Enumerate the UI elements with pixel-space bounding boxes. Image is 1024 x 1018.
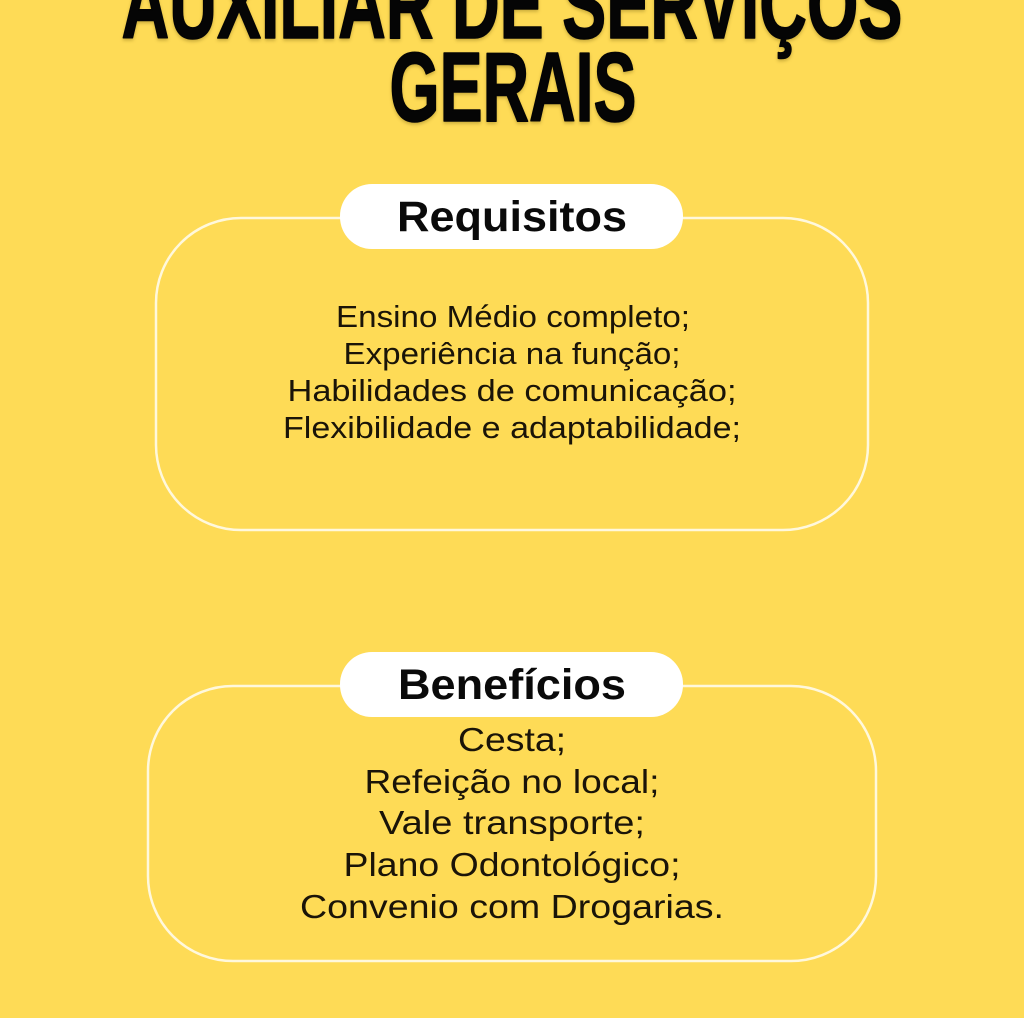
heading pill: requisitos: Requisitos: [397, 193, 627, 241]
text block: beneficios list: [300, 722, 724, 926]
text block: requisitos list: Flexibilidade e adaptabilidade;: [283, 410, 741, 445]
text block: beneficios list: Convenio com Drogarias.: [300, 889, 724, 926]
text block: beneficios list: Plano Odontológico;: [344, 847, 680, 884]
heading pill: beneficios: Benefícios: [398, 661, 626, 709]
panel: beneficios: [148, 652, 876, 961]
title: GERAIS: [390, 32, 636, 142]
text block: beneficios list: Cesta;: [458, 722, 566, 759]
heading pill: beneficios: [340, 652, 683, 717]
panel outline: requisitos: [156, 218, 868, 530]
text block: requisitos list: [283, 299, 741, 445]
panel: requisitos: [156, 184, 868, 530]
heading pill: requisitos: [340, 184, 683, 249]
title: [122, 0, 902, 142]
text block: requisitos list: Experiência na função;: [344, 336, 680, 371]
text block: beneficios list: Vale transporte;: [379, 805, 645, 842]
panel outline: beneficios: [148, 686, 876, 961]
text block: requisitos list: Ensino Médio completo;: [336, 299, 690, 334]
text block: requisitos list: Habilidades de comunicação;: [288, 373, 736, 408]
text block: beneficios list: Refeição no local;: [364, 764, 660, 801]
